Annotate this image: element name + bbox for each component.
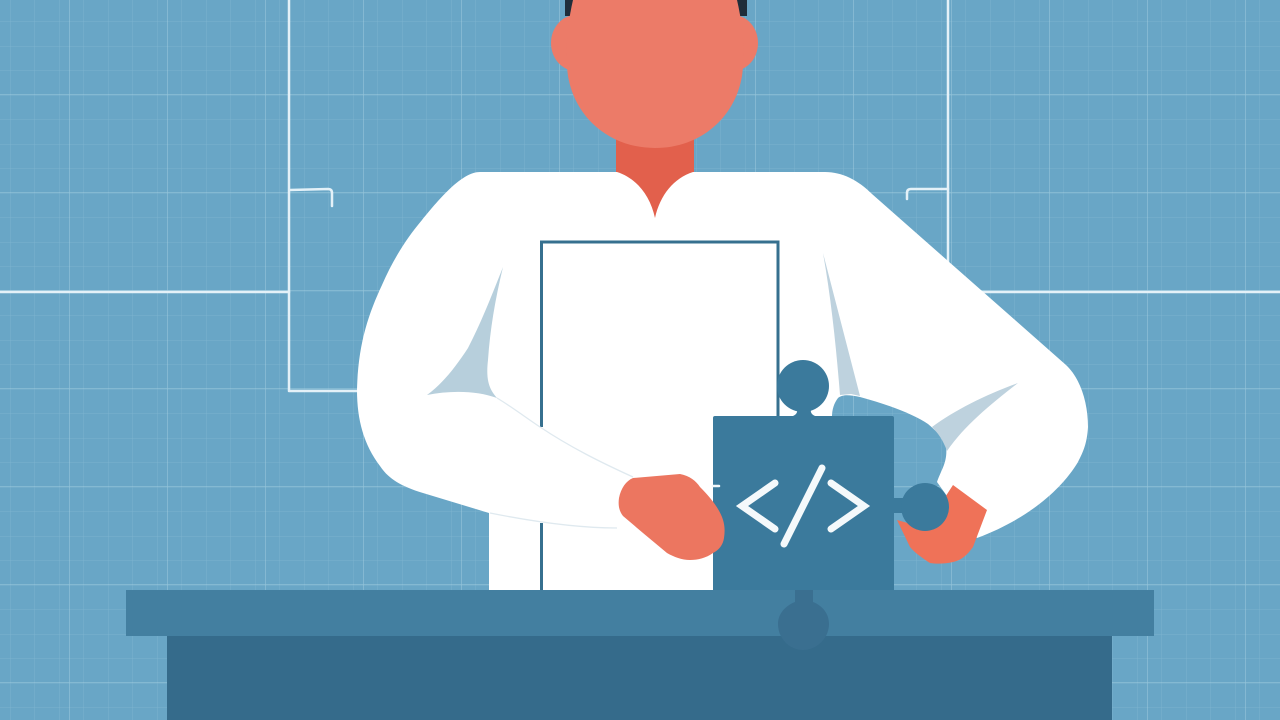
desk (126, 590, 1154, 720)
coat shadow left (427, 267, 503, 398)
white coat (357, 172, 1088, 590)
code symbol (742, 468, 864, 544)
person (357, 0, 1088, 590)
puzzle piece (713, 360, 949, 590)
right hand (897, 485, 987, 564)
blueprint outline lines (0, 0, 1280, 391)
forearm fold lines (490, 398, 633, 528)
coat shadow middle (823, 253, 860, 396)
puzzle socket (778, 590, 829, 650)
neck (616, 130, 694, 222)
head (551, 0, 758, 148)
tablet outline (542, 242, 778, 590)
coat shadow right (932, 383, 1018, 451)
hair (565, 0, 747, 16)
left hand (619, 474, 725, 560)
